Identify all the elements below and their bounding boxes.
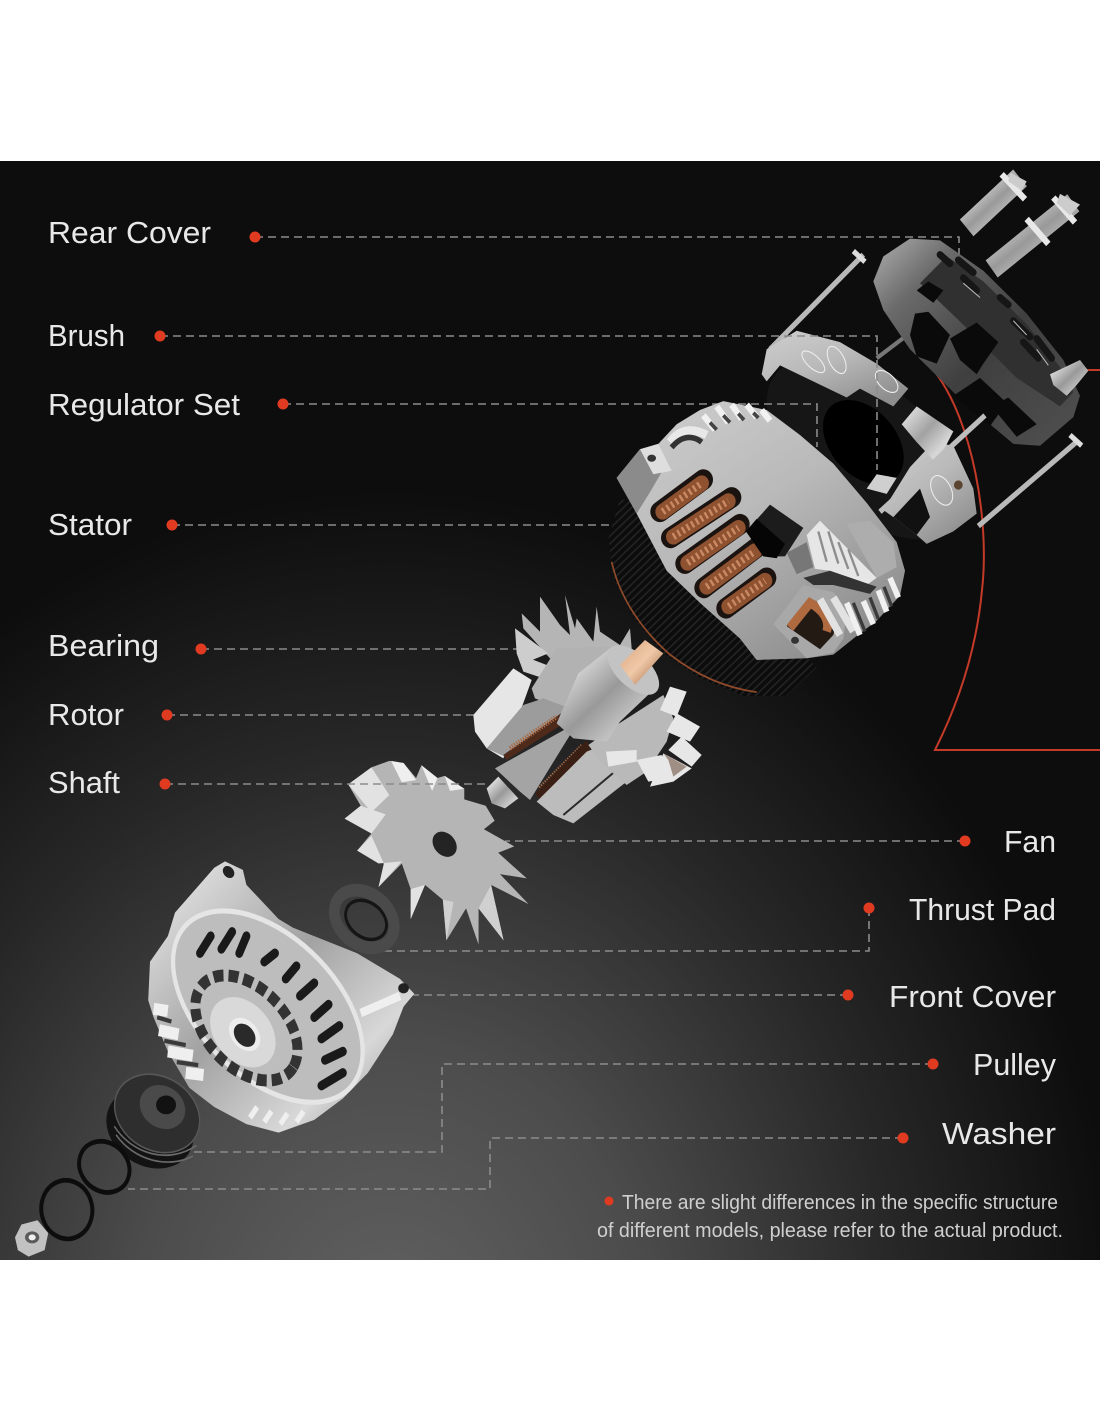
callout: Washer	[128, 1116, 1056, 1189]
callout: Regulator Set: Regulator Set	[48, 387, 240, 422]
part: thrust pad	[326, 879, 402, 959]
part: rear cover with bolts	[873, 172, 1088, 446]
part: front cover	[144, 861, 414, 1141]
callout: Bearing: Bearing	[48, 628, 159, 663]
callout: Bearing	[48, 628, 520, 663]
part: washers	[34, 1133, 136, 1247]
part: rotor with claw poles and slip-ring shaft	[473, 595, 702, 823]
callout: Rear Cover: Rear Cover	[48, 215, 211, 250]
part: pulley	[98, 1062, 208, 1181]
callout: Thrust Pad	[372, 892, 1056, 951]
part: long through-bolts	[770, 251, 1082, 526]
callout: Stator	[48, 507, 610, 542]
callout: Rotor: Rotor	[48, 697, 124, 732]
callout: Pulley: Pulley	[973, 1047, 1056, 1082]
callout: Brush	[48, 318, 877, 470]
callout: Rotor	[48, 697, 480, 732]
callout: Thrust Pad: Thrust Pad	[909, 892, 1056, 927]
callout: Pulley	[188, 1047, 1056, 1152]
callout: Fan	[505, 824, 1056, 859]
callout: Rear Cover	[48, 215, 959, 262]
callout: Front Cover: Front Cover	[889, 979, 1056, 1014]
callout: Brush: Brush	[48, 318, 125, 353]
red contour curve	[935, 370, 1100, 750]
callout: Stator: Stator	[48, 507, 132, 542]
footnote: of different models, please refer to the actual product.	[597, 1220, 1063, 1242]
footnote	[597, 1192, 1063, 1242]
callout: Washer: Washer	[942, 1116, 1056, 1151]
part: brush holder	[737, 323, 996, 575]
callout: Front Cover	[412, 979, 1056, 1014]
part: nut	[15, 1220, 48, 1257]
callout: Regulator Set	[48, 387, 817, 447]
callout: Shaft: Shaft	[48, 765, 120, 800]
part: stator and rectifier housing	[608, 401, 905, 696]
part: fan	[345, 761, 529, 945]
page background panel	[0, 161, 1100, 1260]
footnote: There are slight differences in the specific structure	[622, 1192, 1058, 1214]
callout: Fan: Fan	[1004, 824, 1056, 859]
callout: Shaft	[48, 765, 487, 800]
